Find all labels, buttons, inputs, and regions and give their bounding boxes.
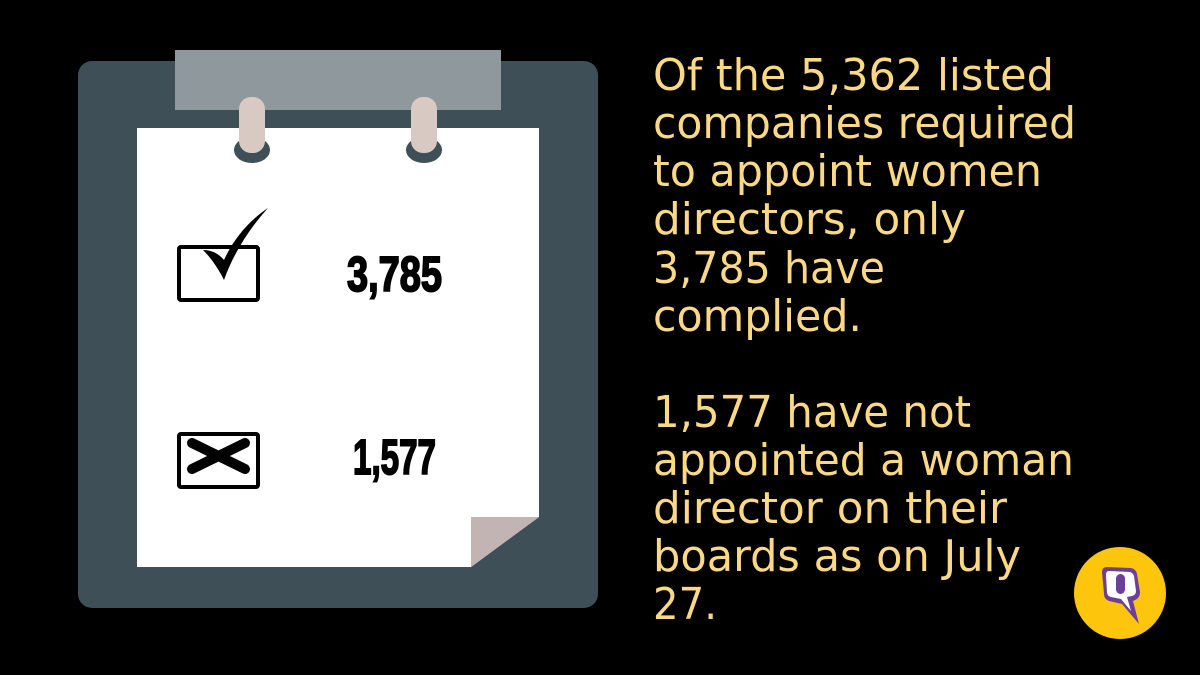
text block: compliance summary: companies required bbox=[653, 98, 1076, 149]
text block: compliance summary: boards as on July bbox=[653, 531, 1021, 582]
folded corner bbox=[471, 517, 539, 567]
non-compliant count: 1,577 bbox=[353, 431, 436, 485]
text block: compliance summary: complied. bbox=[653, 291, 862, 342]
binder ring right bbox=[406, 97, 442, 163]
text block: compliance summary: director on their bbox=[653, 483, 1008, 534]
binder ring left bbox=[234, 97, 270, 163]
compliant count: 3,785 bbox=[347, 248, 442, 302]
icon: cross box bbox=[179, 434, 258, 487]
icon: check box bbox=[179, 208, 268, 300]
text block: compliance summary: appointed a woman bbox=[653, 435, 1074, 486]
icon: The Quint logo bbox=[1074, 547, 1166, 639]
panel: clipboard bbox=[78, 50, 598, 608]
clipboard tape bbox=[175, 50, 501, 110]
text block: compliance summary: Of the 5,362 listed bbox=[653, 50, 1054, 101]
paper sheet bbox=[137, 128, 539, 567]
text block: compliance summary bbox=[653, 50, 1076, 630]
text block: compliance summary: 27. bbox=[653, 579, 717, 630]
clipboard board bbox=[78, 61, 598, 608]
text block: compliance summary: 3,785 have bbox=[653, 243, 885, 294]
text block: compliance summary: directors, only bbox=[653, 194, 966, 245]
text block: compliance summary: 1,577 have not bbox=[653, 387, 971, 438]
text block: compliance summary: to appoint women bbox=[653, 146, 1042, 197]
